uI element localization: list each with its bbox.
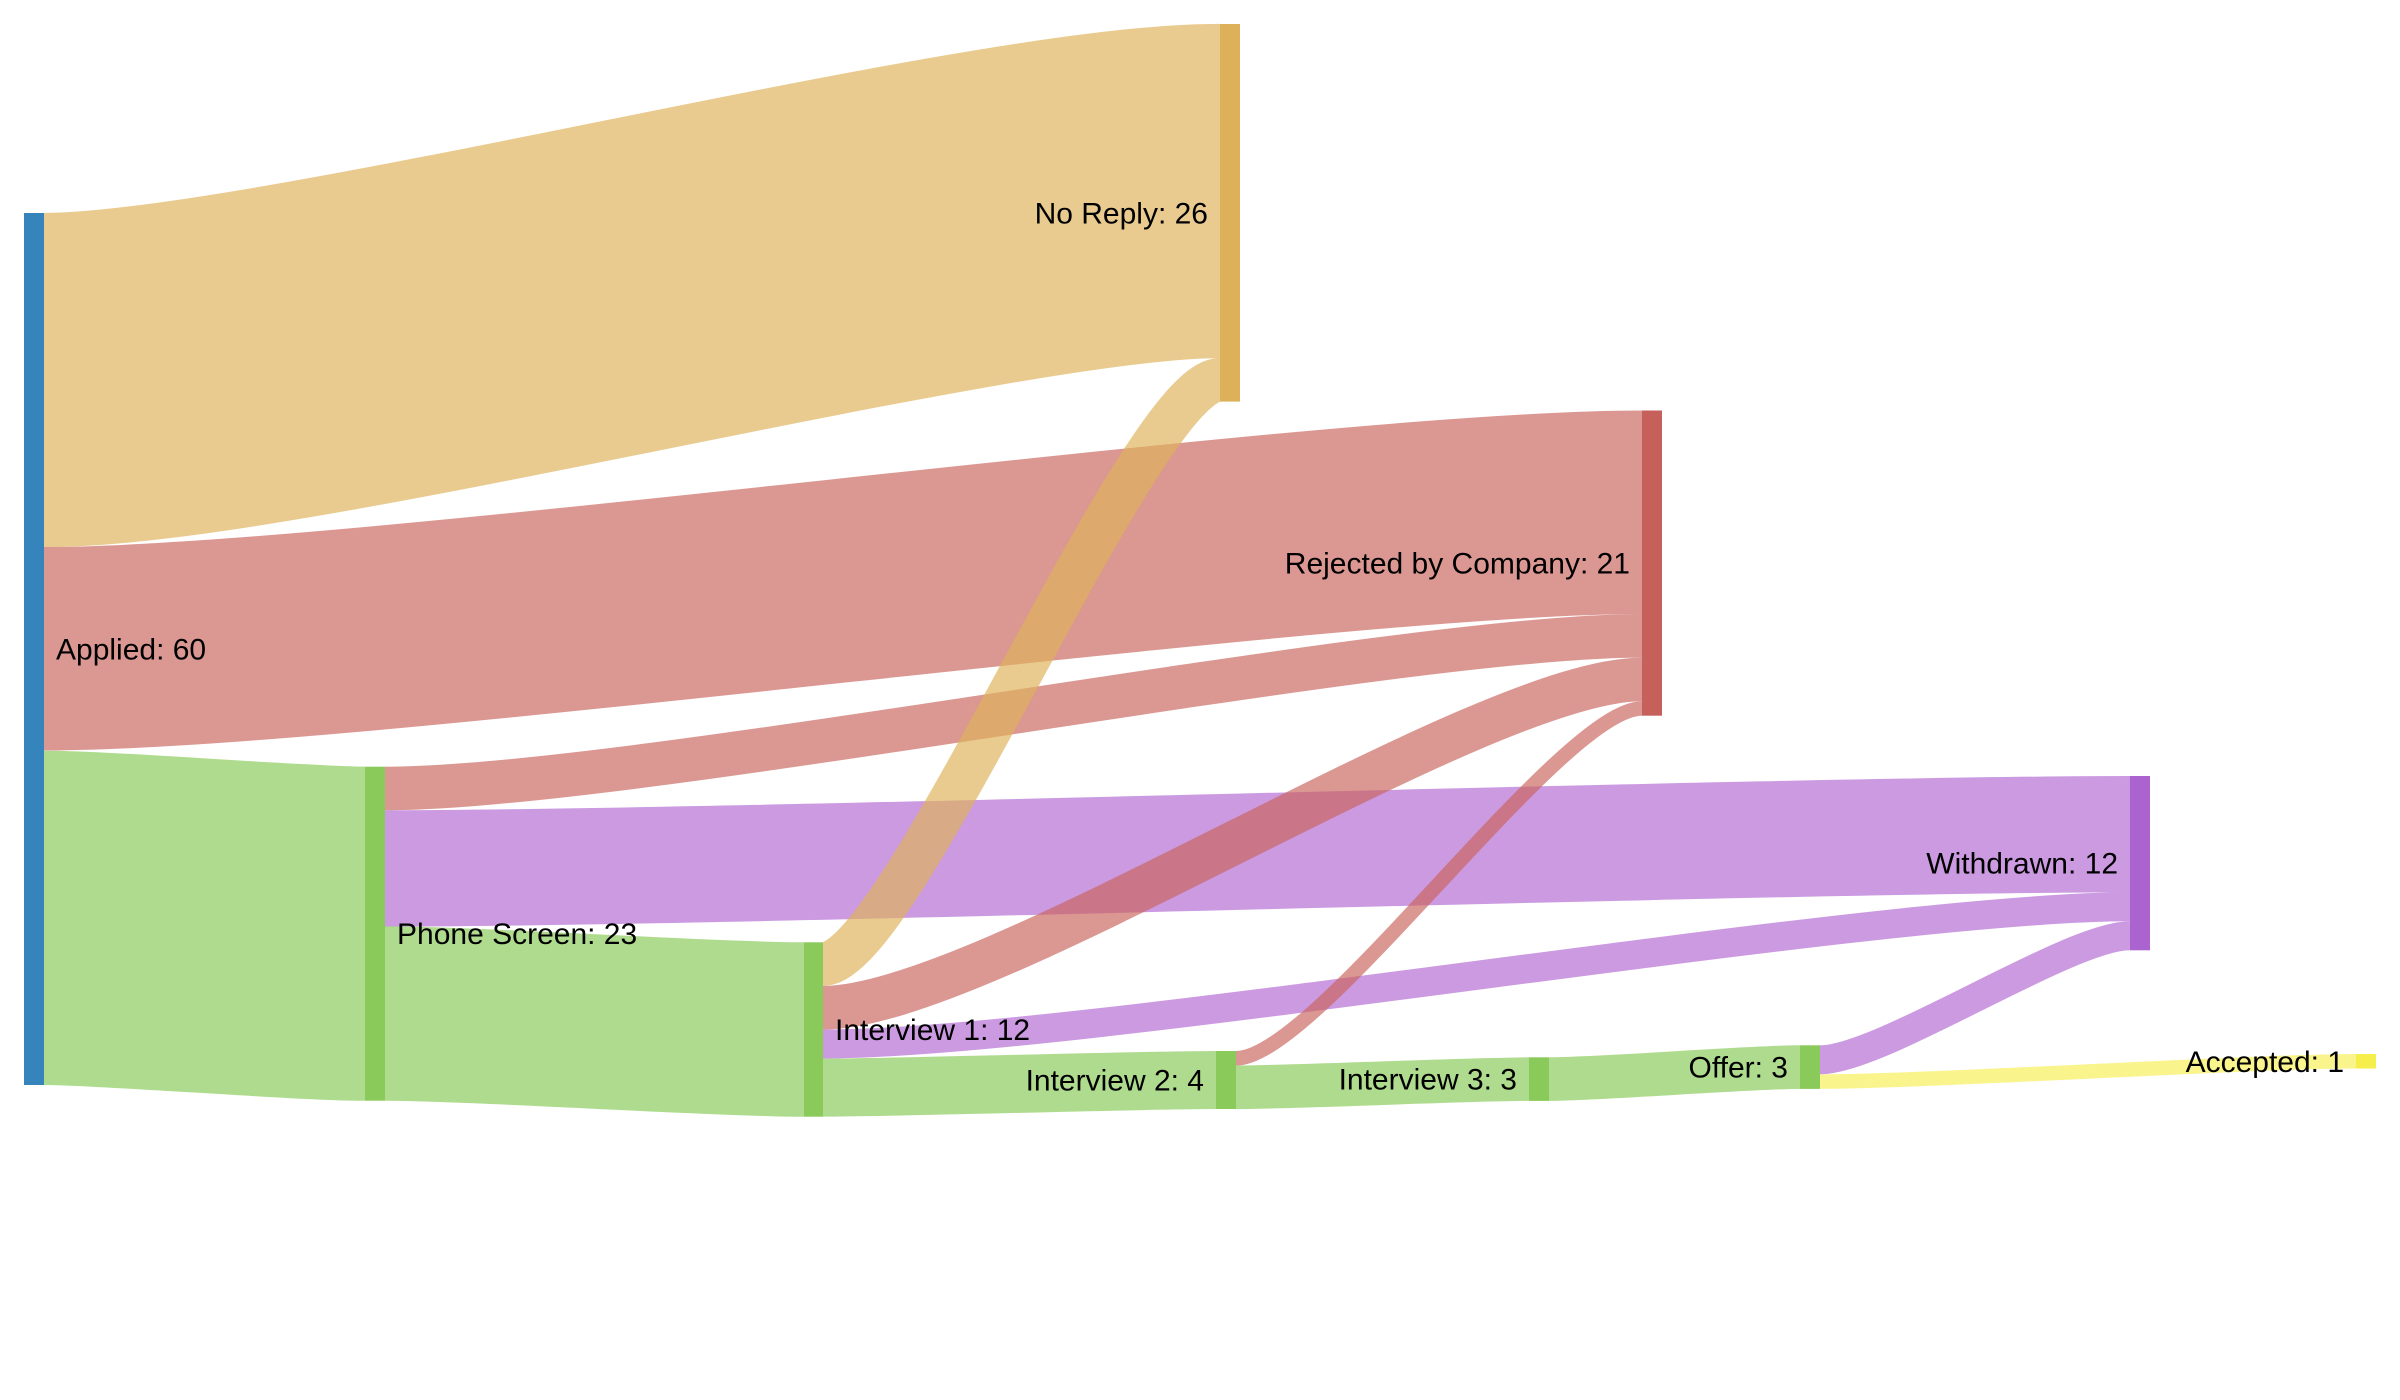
- node: Withdrawn: [2130, 776, 2150, 950]
- flow: Interview 1 to Withdrawn: [823, 907, 2130, 1044]
- node: Interview 2: [1216, 1051, 1236, 1109]
- node: Offer: [1800, 1045, 1820, 1089]
- flow: Phone Screen to Interview 1: [385, 1014, 804, 1030]
- node: Accepted: [2356, 1054, 2376, 1068]
- flow: Offer to Accepted: [1820, 1061, 2356, 1082]
- label: Accepted: Accepted: 1: [2186, 1046, 2344, 1079]
- node: Interview 1: [804, 942, 823, 1117]
- node: Applied: [24, 213, 44, 1085]
- flow: Applied to Rejected by Company: [44, 512, 1642, 649]
- node: Phone Screen: [365, 767, 385, 1101]
- node: No Reply: [1220, 24, 1240, 402]
- label: Interview 3: Interview 3: 3: [1339, 1064, 1517, 1097]
- flow: Applied to No Reply: [44, 191, 1220, 380]
- flow: Phone Screen to Rejected by Company: [385, 636, 1642, 788]
- label: Interview 1: Interview 1: 12: [835, 1014, 1030, 1047]
- label: Rejected by Company: Rejected by Company: 21: [1285, 548, 1630, 581]
- flow: Interview 2 to Interview 3: [1236, 1079, 1529, 1087]
- flow: Interview 3 to Offer: [1549, 1067, 1800, 1079]
- label: Withdrawn: Withdrawn: 12: [1926, 848, 2118, 881]
- label: No Reply: No Reply: 26: [1035, 197, 1208, 230]
- label: Offer: Offer: 3: [1688, 1052, 1788, 1085]
- label: Phone Screen: Phone Screen: 23: [397, 918, 637, 951]
- label: Applied: Applied: 60: [56, 634, 206, 666]
- flow: Applied to Phone Screen: [44, 918, 365, 934]
- node: Rejected by Company: [1642, 410, 1662, 716]
- flow: Interview 1 to Interview 2: [823, 1080, 1216, 1088]
- node: Interview 3: [1529, 1057, 1549, 1101]
- label: Interview 2: Interview 2: 4: [1026, 1064, 1204, 1098]
- flow: Interview 2 to Rejected by Company: [1236, 708, 1642, 1058]
- flow: Offer to Withdrawn: [1820, 936, 2130, 1060]
- flow: Interview 1 to Rejected by Company: [823, 679, 1642, 1008]
- flow: Interview 1 to No Reply: [823, 380, 1220, 964]
- flow: Phone Screen to Withdrawn: [385, 834, 2130, 868]
